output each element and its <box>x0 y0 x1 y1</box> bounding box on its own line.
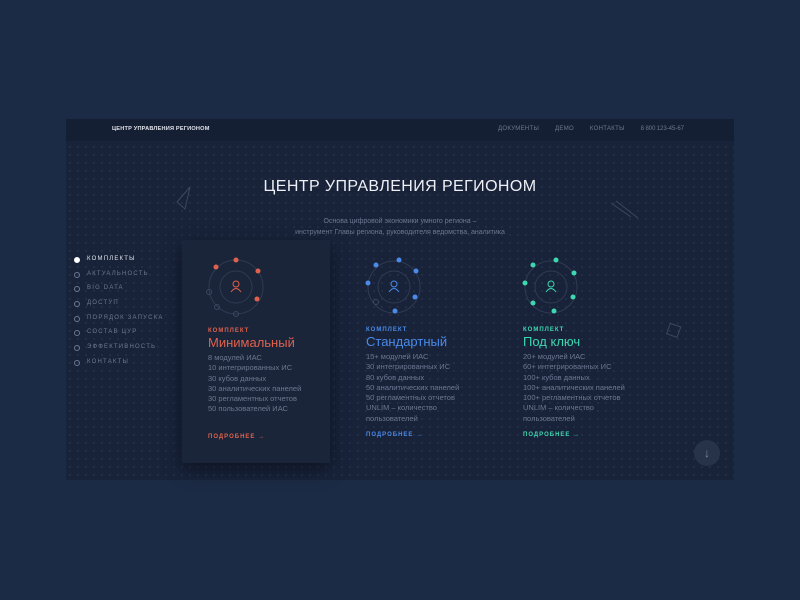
card: Под ключ <box>522 258 625 438</box>
card: Под ключ: 100+ регламентных отчетов <box>523 393 620 402</box>
decorative lines <box>610 200 638 218</box>
card: Минимальный: 8 модулей ИАС <box>208 353 262 362</box>
title: ЦЕНТР УПРАВЛЕНИЯ РЕГИОНОМ <box>264 178 536 195</box>
subtitle <box>295 218 505 236</box>
panel: main window <box>66 119 734 480</box>
card: Под ключ: 100+ кубов данных <box>523 373 590 382</box>
icon: orbit red <box>206 258 264 317</box>
card: Стандартный: Стандартный <box>366 334 447 349</box>
side menu: BIG DATA <box>87 285 124 291</box>
card: Стандартный: пользователей <box>366 414 418 423</box>
card: Под ключ: 20+ модулей ИАС <box>523 352 585 361</box>
card: Под ключ: пользователей <box>523 414 575 423</box>
card: Минимальный: 50 пользователей ИАС <box>208 404 288 413</box>
card: Минимальный: ПОДРОБНЕЕ → <box>208 434 265 440</box>
card: Стандартный: UNLIM – количество <box>366 403 437 412</box>
card: Стандартный: КОМПЛЕКТ <box>366 327 407 333</box>
card: Минимальный: 30 регламентных отчетов <box>208 394 297 403</box>
side menu: ПОРЯДОК ЗАПУСКА <box>87 315 164 321</box>
card: Под ключ: ПОДРОБНЕЕ → <box>523 432 580 438</box>
card: Минимальный: КОМПЛЕКТ <box>208 328 249 334</box>
card: Стандартный: 15+ модулей ИАС <box>366 352 428 361</box>
card: Под ключ: UNLIM – количество <box>523 403 594 412</box>
card: Минимальный: Минимальный <box>208 335 295 350</box>
card: Стандартный: 30 интегрированных ИС <box>366 362 450 371</box>
card: Стандартный: 50 аналитических панелей <box>366 383 459 392</box>
card: Под ключ: 60+ интегрированных ИС <box>523 362 611 371</box>
card: Минимальный <box>206 258 301 440</box>
card: Стандартный: 80 кубов данных <box>366 373 424 382</box>
card: Стандартный <box>366 258 459 438</box>
side menu: ЭФФЕКТИВНОСТЬ <box>87 344 156 350</box>
header bar <box>66 119 734 141</box>
card: Минимальный: 30 кубов данных <box>208 374 266 383</box>
card: Под ключ: 100+ аналитических панелей <box>523 383 625 392</box>
side menu: КОНТАКТЫ <box>87 359 129 365</box>
scroll down button <box>694 440 720 466</box>
side menu: КОМПЛЕКТЫ <box>87 256 136 262</box>
logo text: ЦЕНТР УПРАВЛЕНИЯ РЕГИОНОМ <box>112 126 210 132</box>
card: Стандартный: 50 регламентных отчетов <box>366 393 455 402</box>
card: Под ключ: КОМПЛЕКТ <box>523 327 564 333</box>
subtitle: инструмент Главы региона, руководителя ведомства, аналитика <box>295 228 505 236</box>
card: Под ключ: Под ключ <box>523 334 580 349</box>
icon: orbit green <box>522 258 578 314</box>
side menu <box>74 256 164 366</box>
side menu: СОСТАВ ЦУР <box>87 329 137 335</box>
subtitle: Основа цифровой экономики умного региона – <box>323 218 476 225</box>
icon: orbit blue <box>366 258 420 314</box>
decorative square <box>666 322 682 338</box>
side menu: ДОСТУП <box>87 300 119 306</box>
top nav: ДОКУМЕНТЫ ДЕМО КОНТАКТЫ 8 800 123-45-67 <box>498 126 684 132</box>
card 1 highlighted <box>182 240 330 463</box>
card: Минимальный: 30 аналитических панелей <box>208 384 301 393</box>
card: Минимальный: 10 интегрированных ИС <box>208 363 292 372</box>
card: Стандартный: ПОДРОБНЕЕ → <box>366 432 423 438</box>
decorative triangle <box>176 186 190 210</box>
side menu: АКТУАЛЬНОСТЬ <box>87 271 149 277</box>
scroll down button: ↓ <box>704 446 710 460</box>
